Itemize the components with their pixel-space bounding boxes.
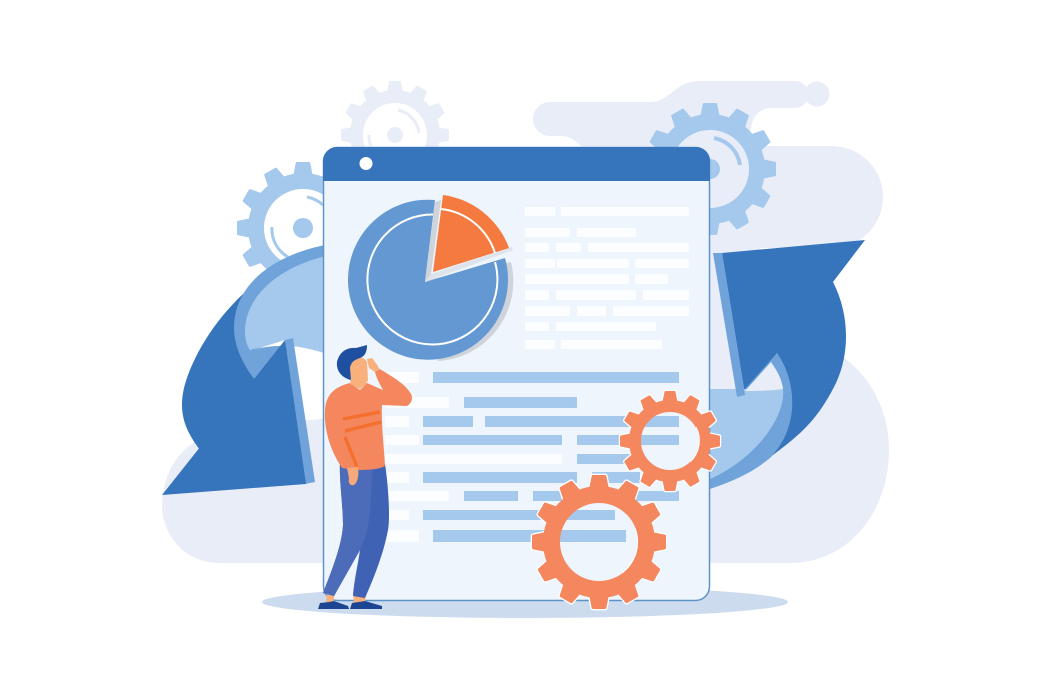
icon: faint top gear bbox=[342, 82, 448, 188]
icon: small orange gear bbox=[621, 392, 719, 490]
hair bbox=[337, 345, 367, 380]
shoes bbox=[318, 601, 382, 609]
head and neck bbox=[347, 356, 368, 389]
arrow: right circular arrow bbox=[700, 240, 865, 492]
background blobs bbox=[162, 81, 889, 563]
ankles bbox=[326, 592, 366, 604]
trousers bbox=[323, 462, 389, 598]
trousers highlight bbox=[323, 462, 372, 596]
panel: report window bbox=[323, 147, 710, 600]
raised hand bbox=[367, 358, 379, 372]
text placeholder bars: lower white block bbox=[385, 372, 562, 542]
icon: large orange gear bbox=[533, 476, 665, 608]
text placeholder bars: upper block bbox=[525, 207, 689, 349]
chart: pie chart bbox=[348, 195, 513, 361]
text placeholder bars: lower blue block bbox=[423, 372, 679, 542]
icon: left blue gear bbox=[238, 163, 368, 293]
sweater bbox=[325, 368, 412, 470]
ground shadow bbox=[262, 586, 788, 618]
figure: thinking man bbox=[318, 345, 412, 609]
arrow: left circular arrow bbox=[162, 244, 330, 495]
lowered hand bbox=[347, 467, 358, 485]
sweater stripes bbox=[343, 412, 381, 467]
icon: right blue gear bbox=[645, 104, 775, 234]
